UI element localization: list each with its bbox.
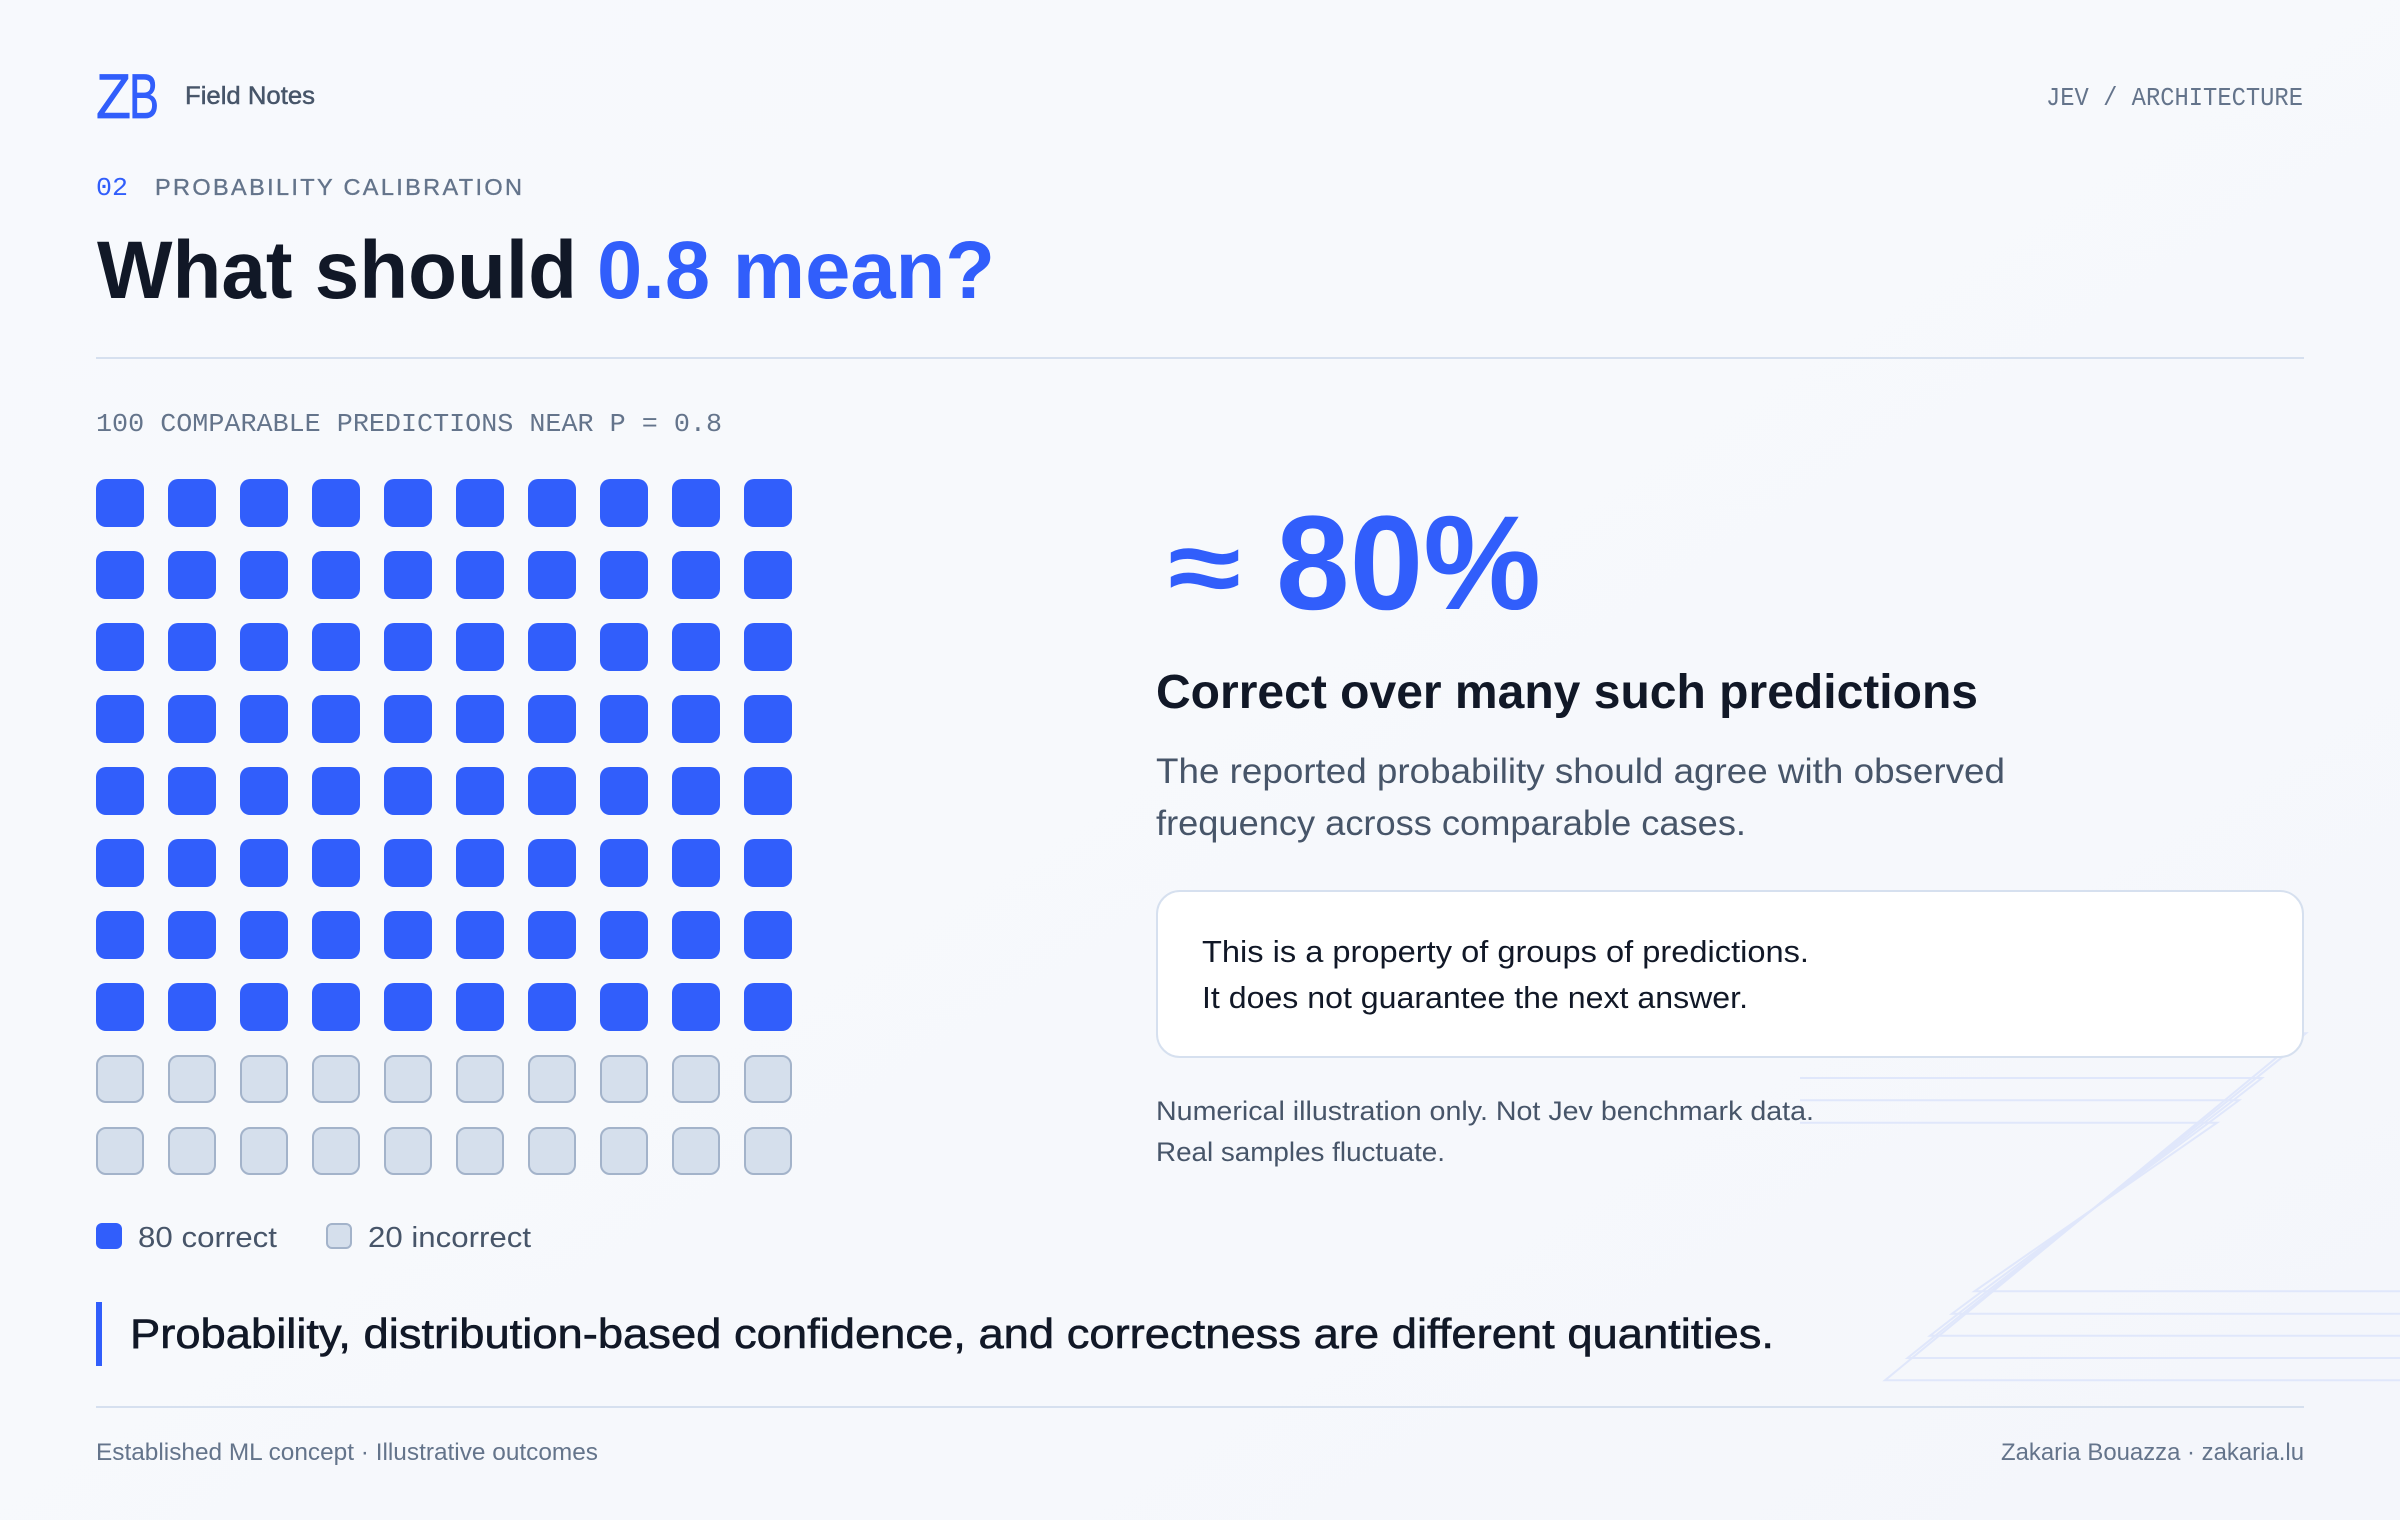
- takeaway callout: [96, 1302, 1774, 1366]
- header: [96, 62, 2303, 132]
- footnote: Numerical illustration only. Not Jev benchmark data.: [1156, 1096, 1814, 1126]
- section number: 02: [96, 173, 128, 203]
- logo: ZB: Z: [96, 62, 131, 132]
- accent bar: [96, 1302, 102, 1366]
- section label: PROBABILITY CALIBRATION: [155, 174, 522, 200]
- callout card: [1157, 891, 2303, 1057]
- legend label: incorrect: 20 incorrect: [368, 1222, 531, 1254]
- waffle grid: 80 correct, 20 incorrect: [96, 479, 792, 1174]
- big stat: 80%: [1276, 489, 1541, 638]
- chart caption: 100 COMPARABLE PREDICTIONS NEAR P = 0.8: [96, 409, 722, 439]
- footer left note: Established ML concept · Illustrative outcomes: [96, 1439, 598, 1466]
- legend label: correct: 80 correct: [138, 1222, 277, 1254]
- footnote: Real samples fluctuate.: [1156, 1137, 1445, 1167]
- legend swatch: incorrect: [327, 1224, 351, 1248]
- panel: waffle chart of 100 predictions: [96, 409, 792, 1254]
- breadcrumb: JEV / ARCHITECTURE: [2046, 83, 2303, 113]
- card text: [1202, 934, 1809, 1015]
- logo: ZB: [96, 62, 159, 132]
- takeaway text: Probability, distribution-based confidence, and correctness are different quantities.: [130, 1310, 1774, 1357]
- main title: 0.8 mean?: [597, 225, 995, 316]
- footer credit: Zakaria Bouazza · zakaria.lu: [2001, 1439, 2304, 1466]
- legend: [96, 1222, 531, 1254]
- brand name: Field Notes: [185, 82, 315, 110]
- stat heading: Correct over many such predictions: [1156, 666, 1978, 719]
- card text: This is a property of groups of predictions.: [1202, 934, 1809, 969]
- title block: [96, 173, 995, 316]
- description: frequency across comparable cases.: [1156, 804, 1746, 843]
- logo: ZB: B: [129, 62, 159, 132]
- description: [1156, 752, 2005, 843]
- card text: It does not guarantee the next answer.: [1202, 980, 1748, 1015]
- footer: [96, 1439, 2304, 1466]
- main title: What should: [97, 225, 577, 316]
- main title: [97, 225, 995, 316]
- big stat: ≈: [1168, 510, 1241, 626]
- legend swatch: correct: [96, 1223, 122, 1249]
- watermark: layered Z lines: [1800, 1033, 2400, 1380]
- panel: result explanation: [1156, 489, 2303, 1167]
- description: The reported probability should agree with observed: [1156, 752, 2005, 791]
- footnote: [1156, 1096, 1814, 1167]
